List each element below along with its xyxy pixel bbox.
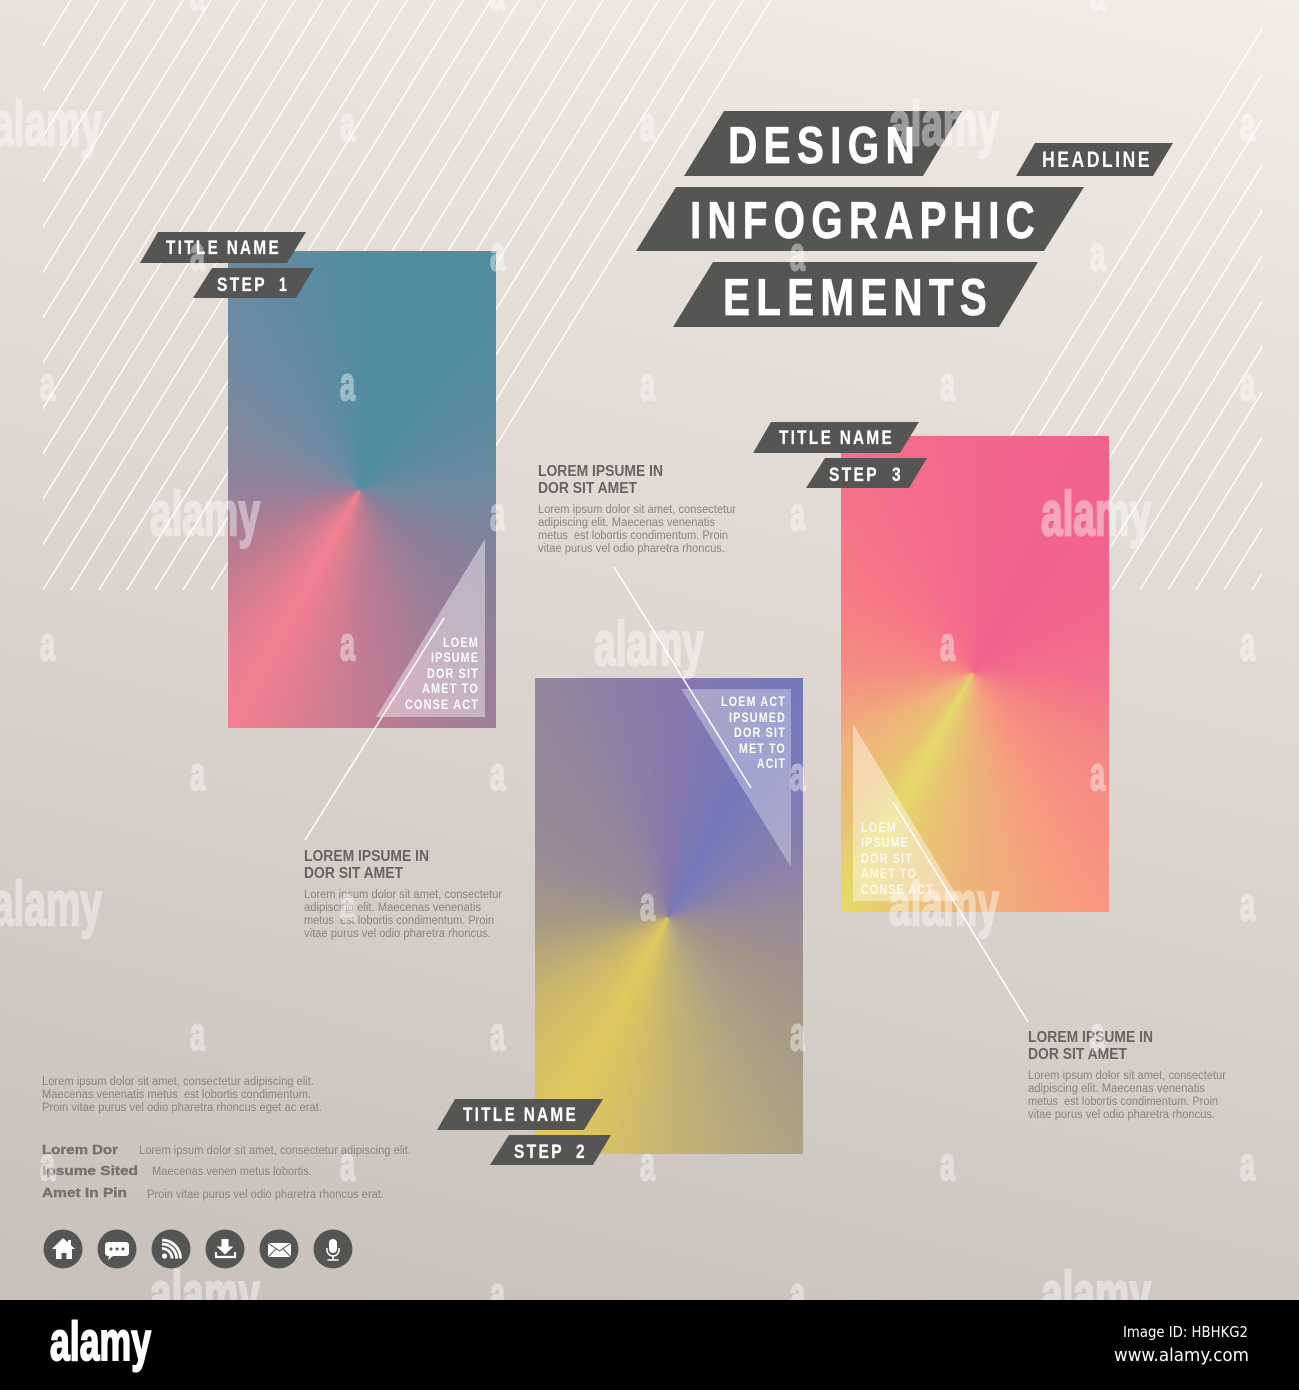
footer image id: Image ID: HBHKG2 [1123,1323,1248,1341]
leader line: upper text to panel 2 [614,567,751,788]
leader line: panel 1 to lower text [305,618,444,840]
icon: microphone [314,1230,352,1268]
text block: lower right: metus est lobortis condimentum. Proin [1028,1096,1218,1108]
key list: Amet In Pin [42,1185,127,1200]
text block: lower left: DOR SIT AMET [304,865,403,882]
watermarks: a [790,747,805,800]
label: title name step 3: STEP [829,464,879,486]
text block: lower right [1028,1029,1226,1121]
footer logo: alamy [50,1310,151,1372]
icon: speech bubble [98,1230,136,1268]
title block: INFOGRAPHIC [690,192,1041,250]
watermarks: a [640,357,655,410]
text block: lower right: Lorem ipsum dolor sit amet, consectetur [1028,1070,1226,1082]
title block [636,111,1173,327]
text block: lower left: vitae purus vel odio pharetra rhoncus. [304,928,491,940]
text block: lower right: vitae purus vel odio pharetra rhoncus. [1028,1109,1215,1121]
text block: upper centre: metus est lobortis condimentum. Proin [538,530,728,542]
text block: lower left [304,848,502,940]
watermarks: a [940,617,955,670]
callout triangle: panel 1: AMET TO [422,681,479,696]
watermarks: alamy [150,1260,260,1329]
watermarks: a [340,97,355,150]
watermarks: a [490,487,505,540]
watermarks: alamy [1041,480,1151,549]
text block: lower right: DOR SIT AMET [1028,1046,1127,1063]
watermarks: a [640,97,655,150]
watermarks: a [340,1137,355,1190]
watermarks: a [640,877,655,930]
diagonal line pattern [43,0,1262,590]
text block: lower right: adipiscing elit. Maecenas venenatis [1028,1083,1205,1095]
watermarks: a [490,227,505,280]
text block: lower right: LOREM IPSUME IN [1028,1029,1153,1046]
text block: lower left: Lorem ipsum dolor sit amet, consectetur [304,889,502,901]
panel 3: pink and yellow gradient card [841,436,1109,912]
callout triangle: panel 3: CONSE ACT [861,882,934,897]
callout triangle: panel 3: AMET TO [861,866,917,881]
bottom left paragraph: Proin vitae purus vel odio pharetra rhoncus eget ac erat. [42,1102,322,1114]
text block: upper centre: LOREM IPSUME IN [538,463,663,480]
label: title name step 2: STEP [514,1141,564,1163]
title block: HEADLINE [1042,147,1152,172]
label: title name step 3: TITLE NAME [779,427,894,449]
watermarks: a [190,1007,205,1060]
watermarks: a [790,487,805,540]
label: title name step 1 [140,232,314,298]
key list: Maecenas venen metus lobortis. [152,1166,312,1178]
label: title name step 3: 3 [892,464,903,486]
icon: home [44,1230,82,1268]
watermarks: alamy [889,870,999,939]
label: title name step 1: TITLE NAME [166,237,281,259]
watermarks: a [1090,747,1105,800]
panel 2: violet and yellow gradient card [535,678,803,1154]
key list: Ipsume Sited [42,1163,138,1178]
title block: DESIGN [728,117,921,175]
watermarks: a [490,1007,505,1060]
watermarks: a [340,617,355,670]
watermarks: a [490,747,505,800]
text block: upper centre: vitae purus vel odio pharetra rhoncus. [538,543,725,555]
footer url: www.alamy.com [1114,1345,1249,1366]
callout triangle: panel 3: DOR SIT [861,851,913,866]
title block: ELEMENTS [723,269,993,327]
watermarks: a [190,227,205,280]
watermarks: alamy [889,90,999,159]
callout triangle: panel 2: DOR SIT [734,725,786,740]
key list: Lorem ipsum dolor sit amet, consectetur adipiscing elit. [139,1145,411,1157]
watermarks: a [790,227,805,280]
key list [42,1142,411,1201]
bottom left paragraph [42,1076,322,1114]
bottom left paragraph: Maecenas venenatis metus est lobortis condimentum. [42,1089,311,1101]
bottom left paragraph: Lorem ipsum dolor sit amet, consectetur adipiscing elit. [42,1076,314,1088]
leader line: panel 3 to right text [893,802,1028,1022]
watermarks: a [190,747,205,800]
callout triangle: panel 3: IPSUME [861,835,909,850]
text block: upper centre: Lorem ipsum dolor sit amet, consectetur [538,504,736,516]
text block: lower left: LOREM IPSUME IN [304,848,429,865]
callout triangle: panel 1: DOR SIT [427,666,479,681]
watermarks: a [790,1007,805,1060]
text block: upper centre: adipiscing elit. Maecenas venenatis [538,517,715,529]
icon: download [206,1230,244,1268]
watermarks: a [790,1267,805,1320]
label: title name step 1: STEP [217,274,267,296]
label: title name step 3 [753,422,927,488]
watermarks: alamy [150,480,260,549]
watermarks: a [40,357,55,410]
callout triangle: panel 1: IPSUME [431,650,479,665]
text block: lower left: metus est lobortis condimentum. Proin [304,915,494,927]
callout triangle: panel 3: LOEM [861,820,897,835]
watermarks: a [40,617,55,670]
panel 1: teal and pink gradient card [228,251,496,728]
watermarks: a [940,357,955,410]
footer bar [0,1300,1299,1390]
label: title name step 2: 2 [576,1141,587,1163]
callout triangle: panel 2 [681,689,791,867]
label: title name step 2 [437,1099,611,1165]
callout triangle: panel 1: LOEM [443,635,479,650]
key list: Proin vitae purus vel odio pharetra rhoncus erat. [147,1189,384,1201]
text block: upper centre [538,463,736,555]
watermarks: a [1090,227,1105,280]
label: title name step 2: TITLE NAME [463,1104,578,1126]
watermarks: a [490,1267,505,1320]
watermarks: a [1090,1007,1105,1060]
watermarks: alamy [1041,1260,1151,1329]
label: title name step 1: 1 [279,274,289,296]
callout triangle: panel 2: MET TO [739,741,786,756]
watermarks: a [640,1137,655,1190]
callout triangle: panel 2: IPSUMED [729,710,786,725]
callout triangle: panel 3 [853,724,960,901]
key list: Lorem Dor [42,1142,118,1157]
text block: upper centre: DOR SIT AMET [538,480,637,497]
icon: envelope [260,1230,298,1268]
text block: lower left: adipiscing elit. Maecenas venenatis [304,902,481,914]
callout triangle: panel 2: LOEM ACT [721,694,786,709]
watermarks: a [940,1137,955,1190]
callout triangle: panel 2: ACIT [757,756,786,771]
callout triangle: panel 1 [376,539,485,717]
watermarks: a [340,357,355,410]
watermarks: a [340,877,355,930]
callout triangle: panel 1: CONSE ACT [405,697,479,712]
icon: rss feed [152,1230,190,1268]
watermarks: alamy [594,610,704,679]
watermarks: a [40,1137,55,1190]
